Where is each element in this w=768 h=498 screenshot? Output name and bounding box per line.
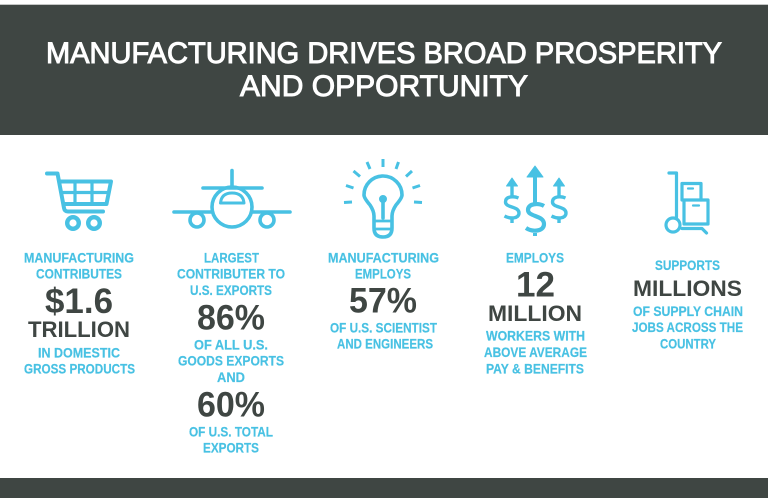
text: employs 57%: AND ENGINEERS bbox=[337, 336, 433, 352]
text: employs 57%: OF U.S. SCIENTIST bbox=[330, 320, 438, 336]
text: supports millions: OF SUPPLY CHAIN bbox=[633, 304, 743, 319]
icon: shopping cart bbox=[47, 174, 111, 229]
text: contributes $1.6 trillion: $1.6 bbox=[45, 282, 113, 321]
text: employs 57%: EMPLOYS bbox=[355, 266, 411, 282]
text: contributes $1.6 trillion bbox=[24, 250, 135, 376]
icon: light bulb bbox=[344, 159, 422, 237]
text: contributes $1.6 trillion: GROSS PRODUCTS bbox=[24, 362, 135, 376]
icon: hand truck with boxes bbox=[666, 173, 708, 233]
panel: manufacturing contributes bbox=[24, 174, 135, 376]
text: exports 86% and 60%: GOODS EXPORTS bbox=[178, 354, 284, 368]
title: AND OPPORTUNITY bbox=[240, 70, 528, 103]
text: 12 million workers: MILLION bbox=[488, 301, 582, 326]
footer band bbox=[0, 478, 768, 498]
text: supports millions: JOBS ACROSS THE bbox=[632, 320, 743, 335]
text: 12 million workers: 12 bbox=[516, 266, 555, 304]
panel: scientists and engineers bbox=[328, 159, 439, 352]
text: exports 86% and 60% bbox=[177, 250, 285, 456]
text: employs 57%: MANUFACTURING bbox=[328, 250, 439, 266]
text: exports 86% and 60%: OF U.S. TOTAL bbox=[189, 424, 273, 440]
title: MANUFACTURING DRIVES BROAD PROSPERITY bbox=[46, 37, 722, 70]
text: exports 86% and 60%: LARGEST bbox=[204, 250, 260, 266]
text: exports 86% and 60%: EXPORTS bbox=[203, 440, 259, 456]
text: exports 86% and 60%: CONTRIBUTER TO bbox=[177, 266, 285, 282]
text: exports 86% and 60%: U.S. EXPORTS bbox=[190, 283, 272, 298]
text: 12 million workers: WORKERS WITH bbox=[486, 328, 585, 344]
text: exports 86% and 60%: AND bbox=[217, 370, 245, 385]
text: exports 86% and 60%: OF ALL U.S. bbox=[194, 338, 268, 352]
title bbox=[46, 37, 722, 103]
text: supports millions: MILLIONS bbox=[633, 276, 742, 301]
text: 12 million workers: EMPLOYS bbox=[506, 250, 564, 266]
text: employs 57%: 57% bbox=[349, 282, 417, 320]
text: exports 86% and 60%: 86% bbox=[197, 298, 265, 338]
panel: largest contributor to exports bbox=[174, 170, 290, 456]
text: supports millions: SUPPORTS bbox=[655, 258, 720, 273]
panel: supply chain jobs bbox=[632, 173, 743, 352]
icon: rising dollar signs bbox=[504, 166, 566, 236]
text: employs 57% bbox=[328, 250, 439, 352]
text: contributes $1.6 trillion: CONTRIBUTES bbox=[36, 266, 122, 282]
text: supports millions bbox=[632, 258, 743, 352]
text: exports 86% and 60%: 60% bbox=[197, 386, 265, 424]
text: 12 million workers bbox=[484, 250, 587, 376]
icon: airplane bbox=[174, 170, 290, 227]
header band bbox=[0, 4, 768, 135]
text: supports millions: COUNTRY bbox=[660, 336, 716, 352]
text: 12 million workers: PAY & BENEFITS bbox=[486, 362, 584, 376]
text: contributes $1.6 trillion: IN DOMESTIC bbox=[38, 346, 120, 360]
text: contributes $1.6 trillion: MANUFACTURING bbox=[24, 250, 134, 266]
text: 12 million workers: ABOVE AVERAGE bbox=[484, 345, 587, 360]
panel: employs 12 million bbox=[484, 166, 587, 376]
text: contributes $1.6 trillion: TRILLION bbox=[28, 317, 130, 342]
